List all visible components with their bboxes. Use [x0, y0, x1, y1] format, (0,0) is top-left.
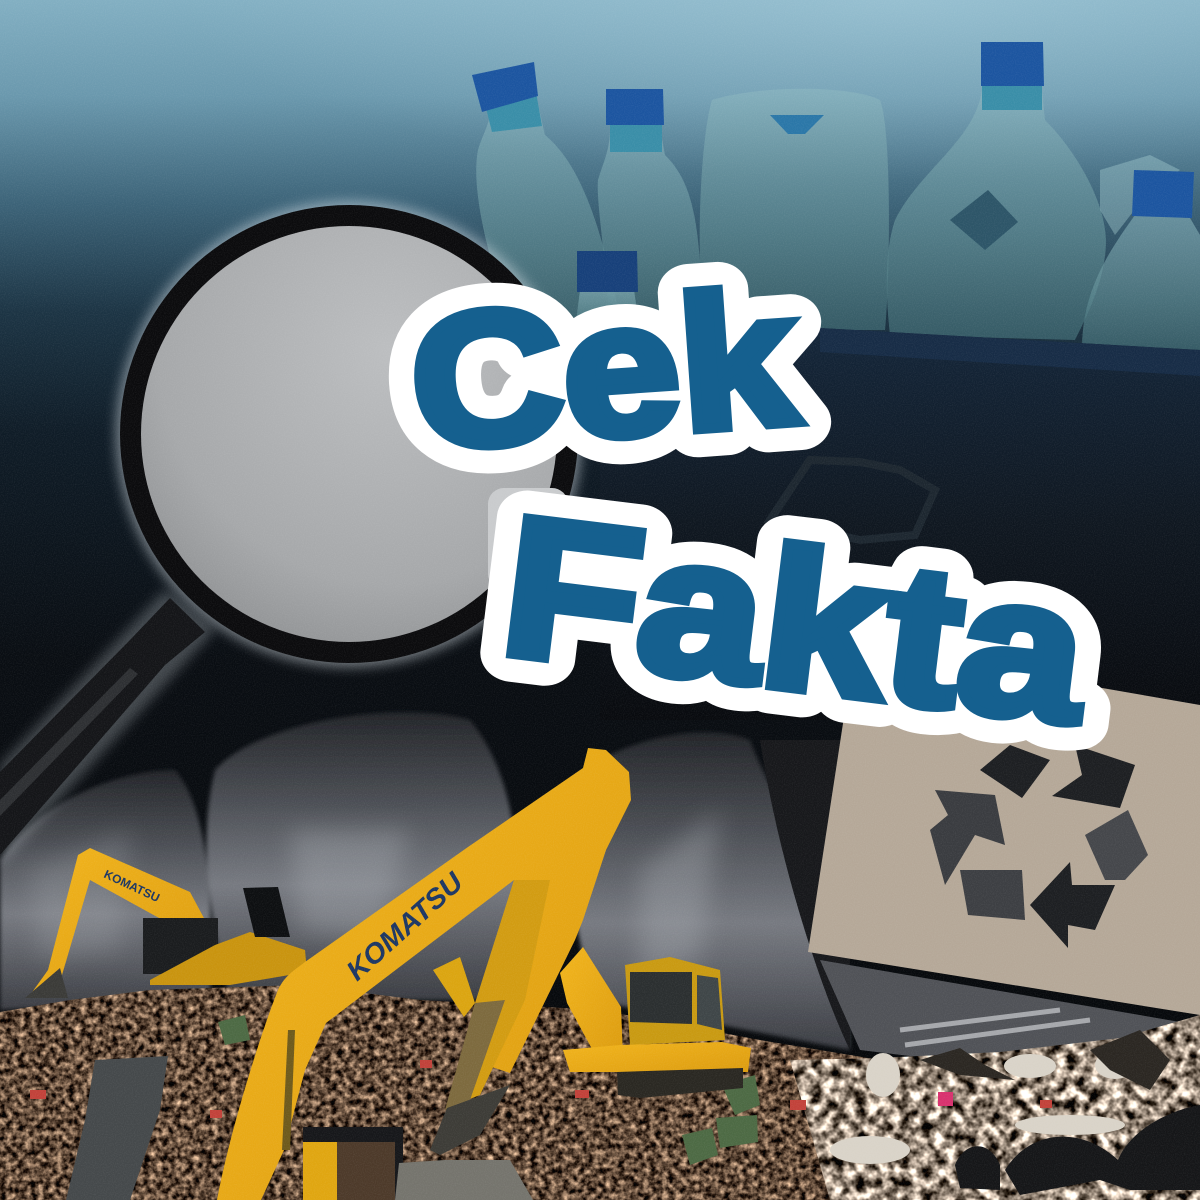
- title: Fakta: Fakta: [492, 474, 1100, 765]
- lens label patch: [488, 488, 568, 590]
- panel: landfill: [0, 980, 1200, 1200]
- bottle 3 square jug: [700, 89, 889, 330]
- background excavator right: [433, 947, 751, 1098]
- icon: recycling arrows: [930, 745, 1148, 948]
- bottle 1: [472, 62, 622, 345]
- bottle 5: [1082, 155, 1200, 352]
- small excavator left: [25, 848, 307, 998]
- brand label: KOMATSU: KOMATSU: [340, 866, 469, 986]
- bottle 4 large: [887, 42, 1106, 340]
- panel: garbage bags: [0, 712, 1180, 1062]
- excavator bucket: [395, 1160, 533, 1200]
- title: Fakta: Fakta: [492, 474, 1100, 765]
- white trash lumps: [830, 1051, 1135, 1164]
- large excavator: [217, 748, 631, 1200]
- bottle 2: [598, 89, 702, 330]
- excavator arm worn section: [447, 880, 550, 1108]
- bottle 6 small front: [575, 251, 640, 330]
- boom dark cylinder: [282, 1030, 295, 1150]
- lens: [141, 226, 557, 642]
- title: Cek: Cek: [404, 252, 803, 490]
- magnifying glass: [0, 201, 582, 865]
- top right light: [0, 0, 1200, 300]
- panel: recycling bin: [600, 328, 1200, 720]
- coloured trash: [30, 1060, 1052, 1118]
- machine at lower left: [66, 1056, 168, 1200]
- green baskets and workers: [218, 1015, 760, 1165]
- dark trash: [920, 1030, 1170, 1090]
- handle: [0, 598, 205, 855]
- panel: plastic bottles: [472, 42, 1200, 352]
- ring: [120, 205, 578, 663]
- black trash bags: [955, 1105, 1200, 1195]
- pink trash: [938, 1092, 953, 1106]
- excavator cab: [303, 1127, 403, 1200]
- title: Cek: Cek: [404, 252, 803, 490]
- panel: cardboard recycling symbol: [808, 645, 1200, 1015]
- brand label small excavator: KOMATSU: [102, 867, 162, 905]
